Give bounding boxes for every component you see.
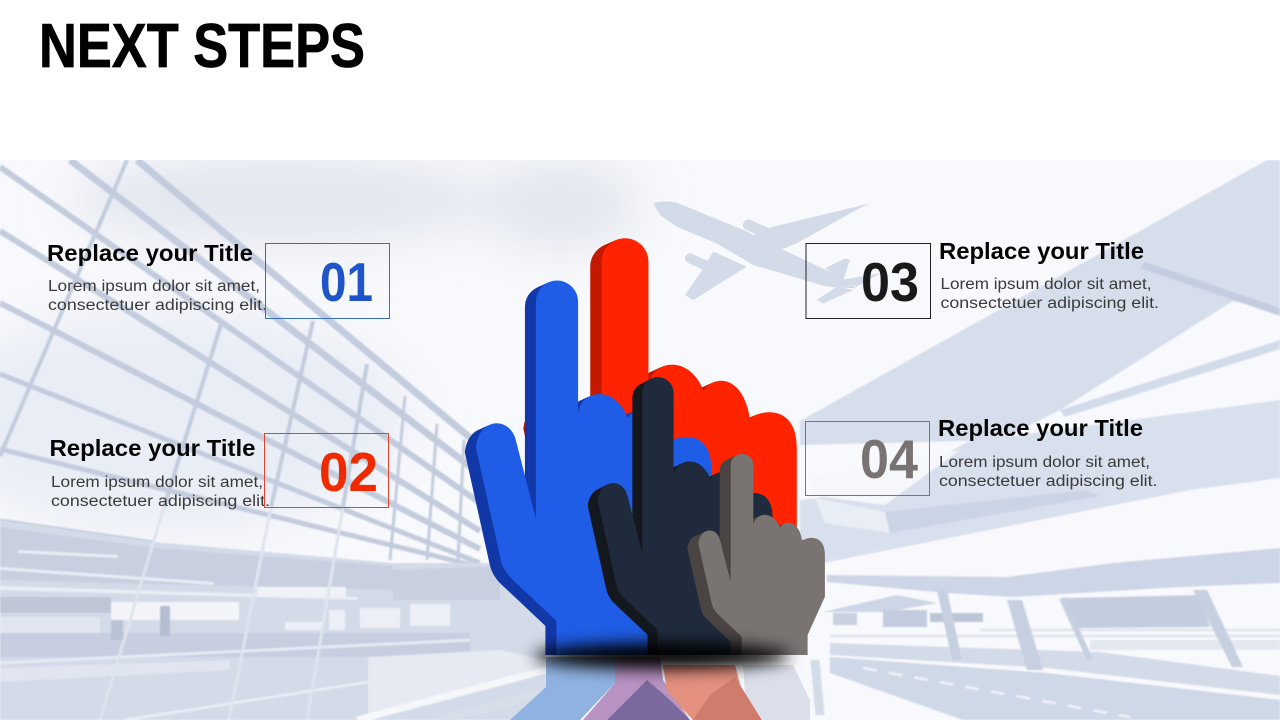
body 04: Lorem ipsum dolor sit amet, — [939, 454, 1150, 471]
glass facade — [0, 160, 480, 567]
body 01: consectetuer adipiscing elit. — [48, 297, 267, 314]
body 04: consectetuer adipiscing elit. — [939, 473, 1158, 490]
heading 02: Replace your Title — [50, 435, 256, 461]
heading 01: Replace your Title — [47, 240, 253, 266]
ground shadow — [534, 643, 790, 669]
clouds — [0, 155, 640, 530]
number box 01 — [266, 244, 390, 318]
number box 02 — [264, 434, 388, 508]
icon: blue pointing hand — [465, 281, 711, 660]
background photo: airport terminal — [0, 155, 1280, 720]
body 04 — [939, 454, 1158, 490]
number box 04 — [806, 422, 930, 496]
number 04: 04 — [860, 428, 918, 490]
icon: red pointing hand — [523, 238, 797, 528]
body 01: Lorem ipsum dolor sit amet, — [48, 278, 260, 295]
body 03: Lorem ipsum dolor sit amet, — [940, 276, 1152, 293]
item 03 — [806, 238, 1159, 318]
reflection beneath hands — [510, 657, 810, 720]
item 02 — [50, 434, 388, 510]
body 03 — [940, 276, 1159, 312]
item 04 — [806, 415, 1158, 496]
body 03: consectetuer adipiscing elit. — [940, 295, 1159, 312]
body 02: consectetuer adipiscing elit. — [51, 493, 270, 510]
number 02: 02 — [319, 441, 378, 503]
number 01: 01 — [320, 251, 373, 313]
icon: grey pointing hand — [687, 454, 825, 660]
heading 03: Replace your Title — [939, 238, 1144, 264]
body 02: Lorem ipsum dolor sit amet, — [51, 474, 263, 491]
number 03: 03 — [861, 251, 919, 313]
terminal building lower band — [0, 507, 546, 720]
body 02 — [51, 474, 270, 510]
airplane silhouette — [653, 201, 880, 303]
item 01 — [47, 240, 390, 318]
roof beams — [800, 160, 1280, 720]
icon: navy pointing hand — [588, 377, 773, 660]
body 01 — [48, 278, 267, 314]
title: NEXT STEPS — [39, 12, 365, 81]
number box 03 — [806, 244, 930, 318]
heading 04: Replace your Title — [938, 415, 1143, 441]
